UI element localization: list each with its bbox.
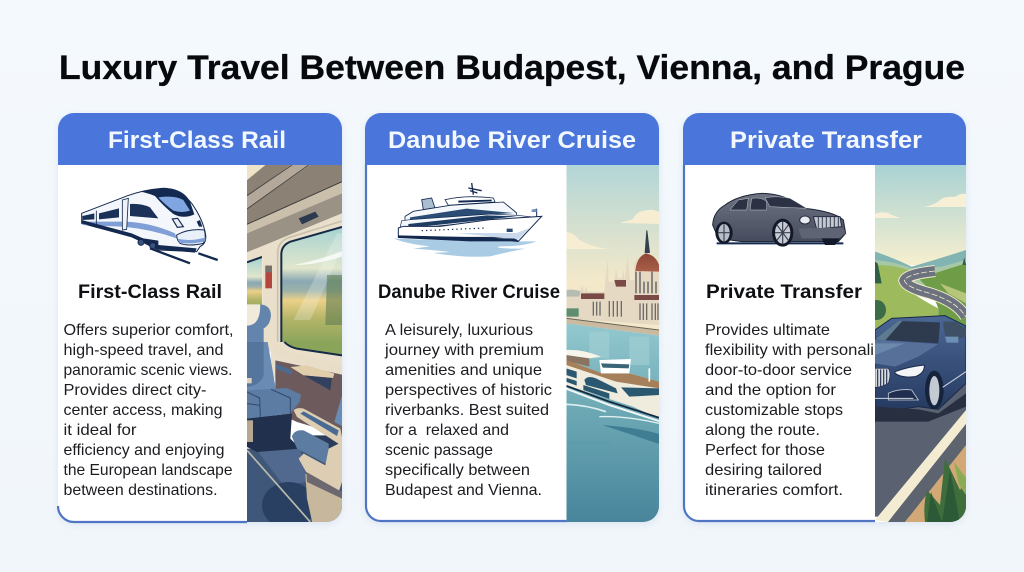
description: danube river cruise: specifically between: [385, 462, 530, 479]
description: danube river cruise: riverbanks. Best suited: [385, 402, 549, 419]
description: danube river cruise: journey with premium: [384, 342, 544, 359]
description: danube river cruise: [384, 322, 552, 499]
description: first-class rail: high-speed travel, and: [64, 342, 224, 359]
description: first-class rail: efficiency and enjoying: [64, 442, 224, 459]
subheading: first-class rail: First-Class Rail: [78, 282, 222, 303]
icon: luxury sedan: [713, 193, 846, 247]
image: winding road with car: [867, 165, 966, 522]
description: first-class rail: between destinations.: [64, 482, 218, 499]
image: budapest parliament and danube: [566, 165, 659, 525]
header: danube river cruise: [365, 113, 659, 165]
description: danube river cruise: amenities and unique: [385, 362, 542, 379]
description: danube river cruise: scenic passage: [385, 442, 493, 459]
description: private transfer: flexibility with personali: [705, 342, 874, 359]
description: private transfer: [705, 322, 874, 499]
title: Luxury Travel Between Budapest, Vienna, and Prague: [59, 49, 965, 87]
icon: cruise ship: [393, 183, 542, 257]
description: private transfer: itineraries comfort.: [705, 482, 843, 499]
description: private transfer: door-to-door service: [705, 362, 852, 379]
subheading: danube river cruise: Danube River Cruise: [378, 282, 560, 303]
description: danube river cruise: for a relaxed and: [385, 422, 509, 439]
description: private transfer: and the option for: [705, 382, 837, 399]
icon: high-speed train: [82, 188, 218, 263]
description: private transfer: desiring tailored: [705, 462, 822, 479]
description: private transfer: Perfect for those: [705, 442, 825, 459]
header: first-class rail: [58, 113, 342, 165]
header: private transfer: Private Transfer: [730, 127, 922, 154]
description: first-class rail: it ideal for: [64, 422, 137, 439]
description: danube river cruise: A leisurely, luxurious: [385, 322, 533, 339]
description: danube river cruise: perspectives of historic: [385, 382, 552, 399]
description: first-class rail: Provides direct city-: [64, 382, 206, 399]
panel: private transfer: [683, 113, 966, 522]
description: private transfer: Provides ultimate: [705, 322, 830, 339]
description: first-class rail: Offers superior comfort,: [64, 322, 234, 339]
header: private transfer: [683, 113, 966, 165]
image: train interior: [247, 165, 342, 529]
subheading: private transfer: Private Transfer: [706, 282, 863, 303]
description: first-class rail: panoramic scenic views.: [64, 362, 232, 379]
description: danube river cruise: Budapest and Vienna.: [385, 482, 542, 499]
header: danube river cruise: Danube River Cruise: [388, 127, 636, 154]
panel: first-class rail: [58, 113, 342, 529]
description: private transfer: along the route.: [705, 422, 820, 439]
panel: danube river cruise: [365, 113, 659, 525]
header: first-class rail: First-Class Rail: [108, 127, 286, 154]
description: first-class rail: center access, making: [64, 402, 222, 419]
roadside plant: [924, 458, 966, 522]
description: first-class rail: [64, 322, 234, 499]
description: first-class rail: the European landscape: [64, 462, 233, 479]
description: private transfer: customizable stops: [705, 402, 843, 419]
infographic canvas: [56, 54, 968, 526]
